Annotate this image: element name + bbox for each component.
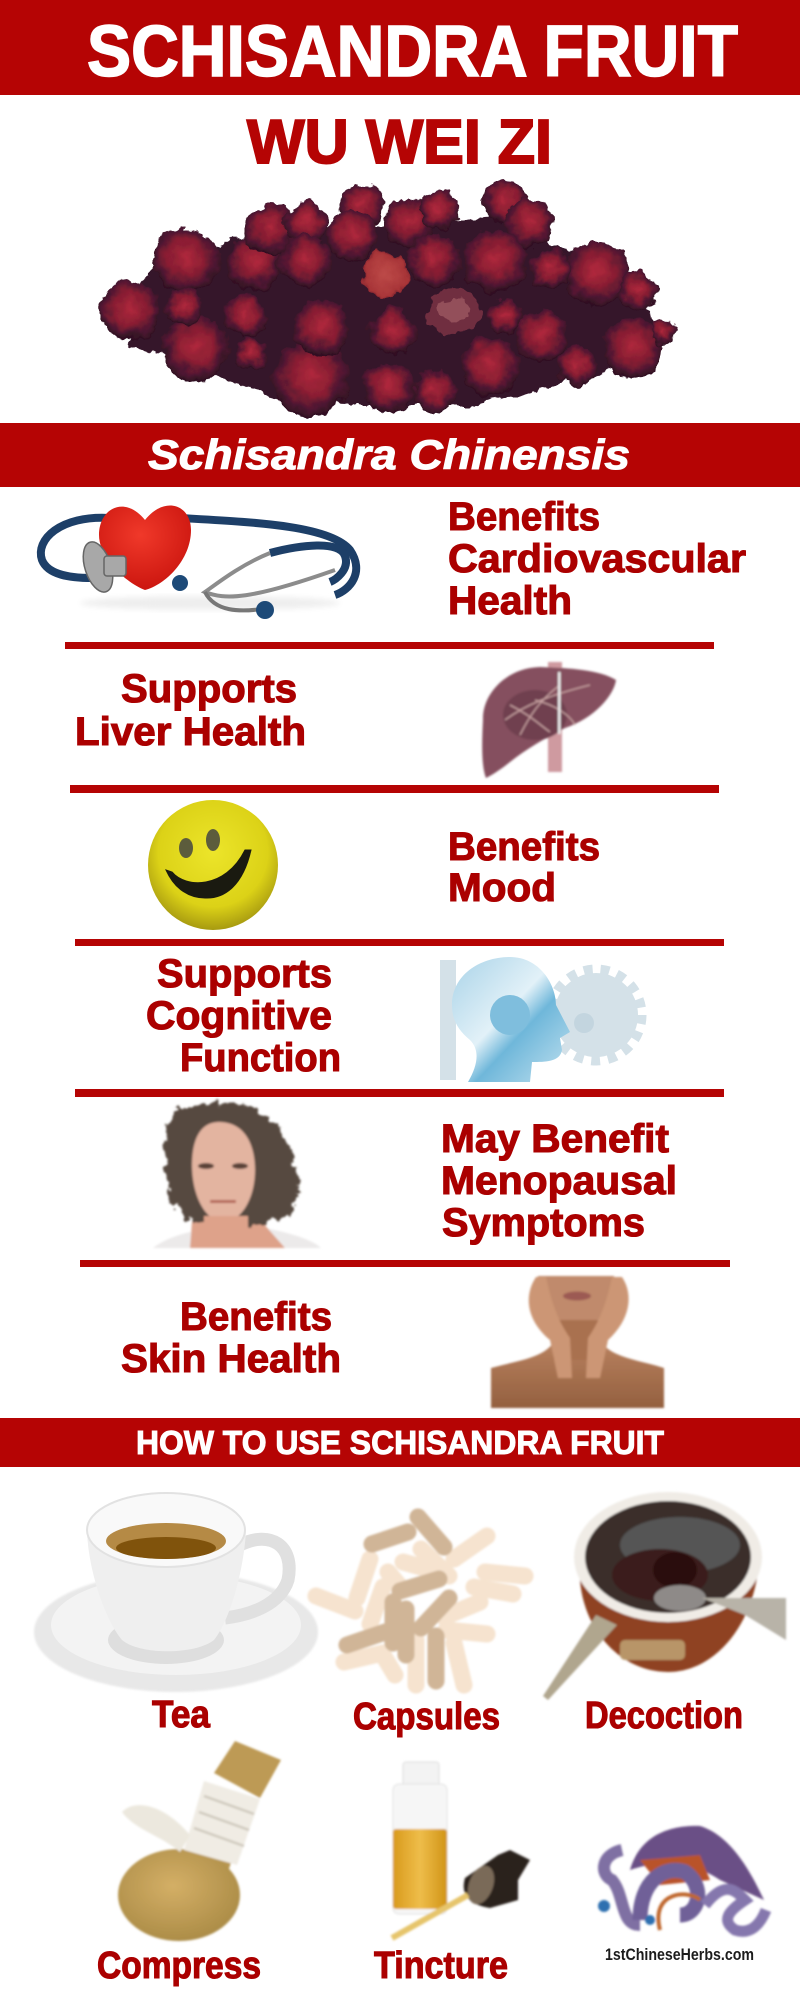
use: tincture [374,1762,530,1987]
icon: teacup and saucer [34,1493,318,1692]
subtitle: Wu Wei Zi: WU WEI ZI [247,108,552,177]
text: Symptoms [442,1201,645,1245]
text: Function [180,1036,341,1080]
icon: woman holding face [491,1276,664,1408]
label: Compress [97,1945,261,1987]
bright berry [362,251,408,297]
use: decoction [543,1492,786,1737]
banner: Schisandra Chinensis: Schisandra Chinensis [148,431,630,478]
icon: tincture bottle with dropper [392,1762,530,1938]
logo: dragon and site name [598,1826,766,1964]
use: tea [34,1493,318,1736]
benefit: cognitive [146,952,642,1082]
benefit: skin [121,1276,664,1408]
text: Benefits [448,495,600,539]
text: Liver Health [75,710,306,754]
text: Cognitive [146,994,332,1038]
icon: dragon [598,1826,766,1931]
text: Benefits [448,825,600,869]
use: capsules [316,1517,525,1738]
banner: how to use: HOW TO USE SCHISANDRA FRUIT [136,1424,664,1461]
benefit: liver [75,662,616,778]
text: Skin Health [121,1337,341,1381]
benefit: mood [148,800,600,930]
text: Health [448,579,572,623]
benefit: cardiovascular [41,495,746,623]
banner: Schisandra Chinensis [0,423,800,487]
site name: 1stChineseHerbs.com [605,1945,754,1964]
text: Menopausal [441,1159,677,1203]
icon: smiley ball [148,800,278,930]
title banner: SCHISANDRA FRUIT [87,12,738,92]
text: Mood [448,866,556,910]
label: Capsules [353,1696,500,1738]
label: Tincture [374,1945,508,1987]
benefit: menopausal [153,1104,677,1248]
text [448,495,746,623]
text [75,667,306,754]
icon: copper pot and spoon [543,1492,786,1700]
label: Tea [152,1694,211,1736]
text: Cardiovascular [448,537,746,581]
text: Supports [157,952,332,996]
image: dried schisandra berries [100,180,676,417]
icon: liver [482,662,616,778]
text [146,952,341,1080]
text [441,1117,677,1245]
icon: capsules [316,1517,525,1685]
label: Decoction [585,1695,743,1737]
text [121,1295,341,1381]
icon: head with gears [440,957,642,1082]
icon: herbal compress [118,1741,281,1941]
icon: heart and stethoscope [41,506,356,619]
banner: how to use [0,1418,800,1467]
text: Benefits [180,1295,332,1339]
text [448,825,600,910]
use: compress [97,1741,281,1987]
icon: woman portrait [153,1104,321,1248]
text: May Benefit [441,1117,669,1161]
text: Supports [121,667,297,711]
